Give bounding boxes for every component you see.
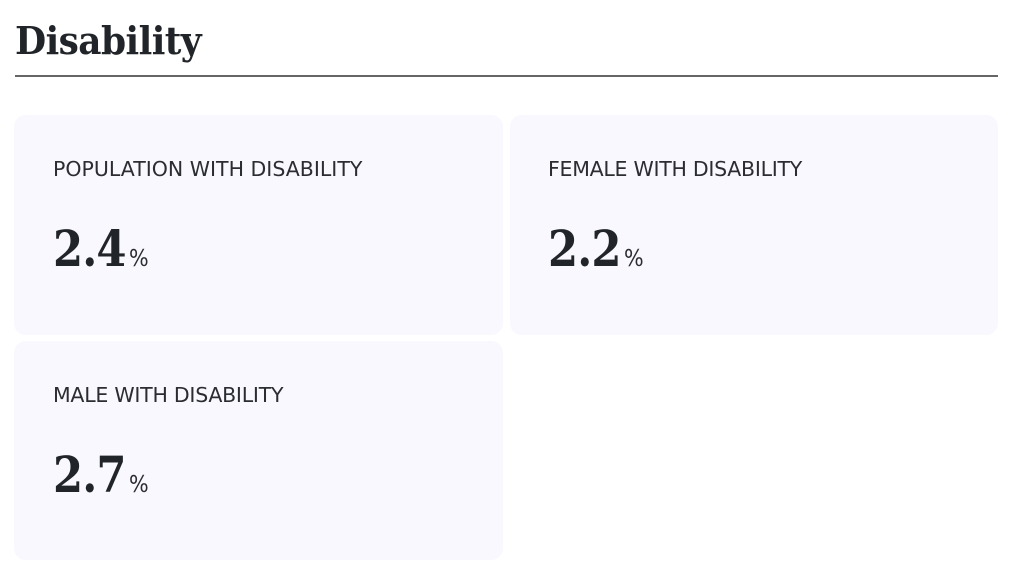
panel: population with disability [14,115,503,334]
label: female with disability: FEMALE WITH DISABILITY [548,157,802,181]
label: male with disability: MALE WITH DISABILITY [53,383,283,407]
value: 2.4%: 2.4 [53,219,126,278]
panel: male with disability [14,341,503,560]
panel: female with disability [510,115,998,334]
value: 2.4%: % [129,246,149,272]
value: 2.7%: 2.7 [53,445,126,504]
title: Disability [15,18,201,63]
value: 2.2%: 2.2 [548,219,621,278]
value: 2.7%: % [129,472,149,498]
value: 2.2%: % [624,246,644,272]
label: population with disability: POPULATION WITH DISABILITY [53,157,362,181]
